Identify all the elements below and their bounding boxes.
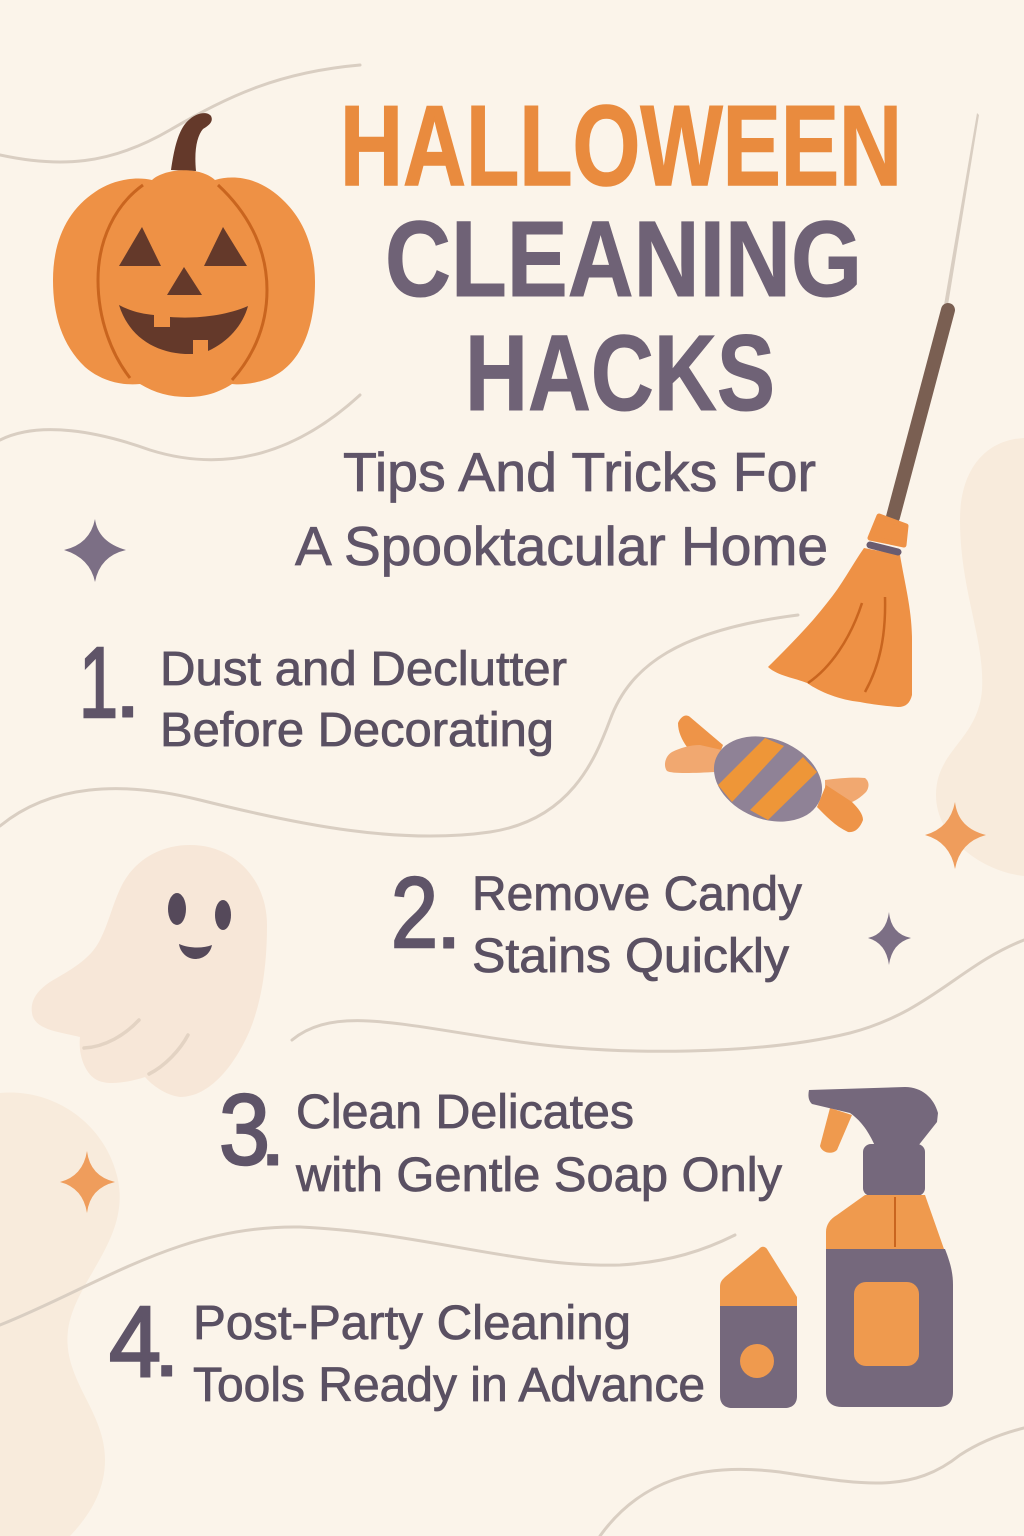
- tip 2: [391, 857, 802, 983]
- tip 4: Post-Party Cleaning: [193, 1297, 631, 1350]
- icon: candy: [665, 716, 868, 837]
- icon: broom: [768, 113, 979, 707]
- tip 3: .: [263, 1102, 282, 1180]
- title: [340, 83, 902, 433]
- tip 4: [109, 1286, 705, 1412]
- tip 1: Dust and Declutter: [160, 643, 567, 696]
- tip 3: with Gentle Soap Only: [295, 1149, 782, 1202]
- sparkle: orange left: [60, 1151, 115, 1213]
- icon: ghost: [32, 845, 267, 1097]
- tip 2: 2: [391, 857, 438, 969]
- subtitle: A Spooktacular Home: [295, 515, 828, 577]
- title: CLEANING: [385, 198, 862, 319]
- tip 1: .: [118, 654, 137, 732]
- tip 1: [79, 627, 567, 757]
- icon: spray bottles: [720, 1087, 953, 1408]
- tip 4: 4: [109, 1286, 161, 1398]
- tip 4: Tools Ready in Advance: [193, 1359, 705, 1412]
- tip 4: .: [157, 1313, 176, 1391]
- title: HACKS: [465, 312, 775, 433]
- tip 1: 1: [79, 627, 118, 739]
- tip 2: Remove Candy: [472, 868, 802, 921]
- sparkle: purple left: [64, 519, 126, 582]
- sparkle: purple right: [868, 912, 911, 965]
- icon: pumpkin: [53, 113, 315, 397]
- tip 2: Stains Quickly: [472, 930, 789, 983]
- tip 3: Clean Delicates: [296, 1086, 634, 1139]
- tip 3: 3: [219, 1074, 270, 1186]
- tip 2: .: [439, 885, 458, 963]
- subtitle: [295, 441, 828, 577]
- sparkle: orange right: [925, 802, 986, 869]
- tip 1: Before Decorating: [160, 704, 554, 757]
- tip 3: [219, 1074, 782, 1202]
- subtitle: Tips And Tricks For: [343, 441, 816, 503]
